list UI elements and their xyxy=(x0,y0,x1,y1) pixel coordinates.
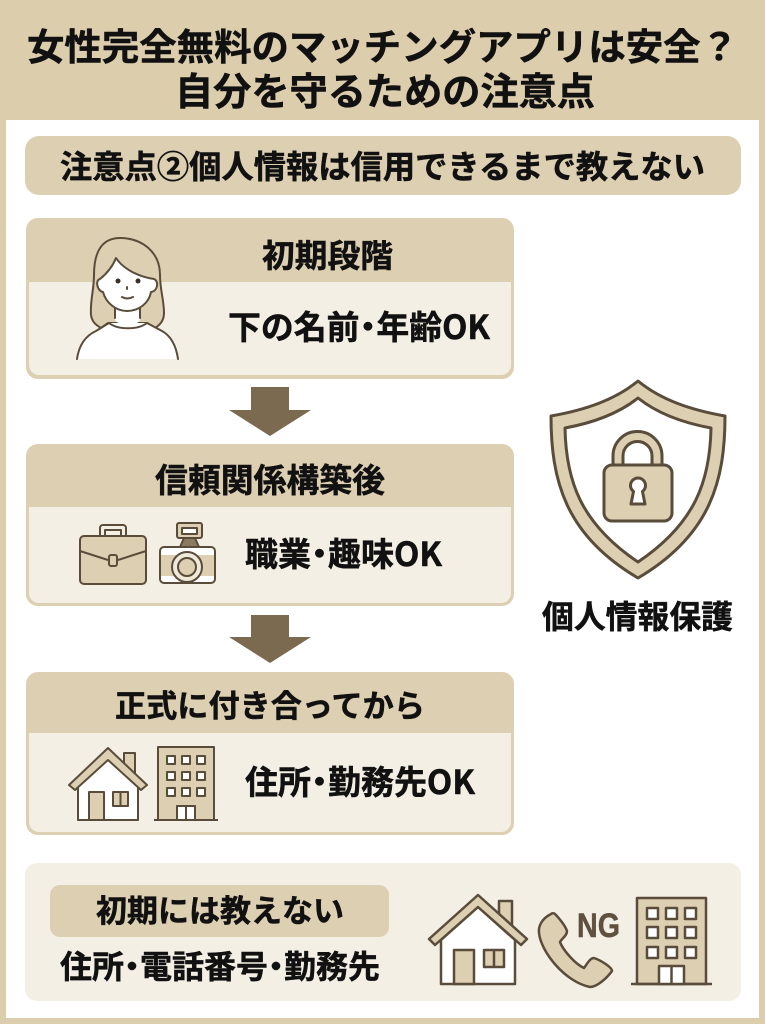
label: personal information protection: 個人情報保護 xyxy=(542,592,733,638)
arrow 1 xyxy=(229,387,311,436)
icon: house xyxy=(429,895,527,984)
icon: camera xyxy=(160,523,215,583)
panel: after officially dating xyxy=(26,672,514,835)
icon: telephone xyxy=(539,913,612,987)
icon: woman xyxy=(77,238,178,359)
panel: do not tell early xyxy=(25,863,741,1001)
icon: house xyxy=(69,748,147,820)
panel: after building trust xyxy=(26,444,514,606)
heading: caution 2: 注意点②個人情報は信用できるまで教えない xyxy=(60,142,705,188)
icon: shield with padlock xyxy=(551,381,725,578)
icon: briefcase xyxy=(80,525,146,584)
icon: office building xyxy=(631,898,712,984)
text: address, phone, workplace: 住所・電話番号・勤務先 xyxy=(60,942,380,988)
title xyxy=(27,17,738,116)
heading: after officially dating: 正式に付き合ってから xyxy=(115,681,425,726)
heading: do not tell early xyxy=(50,885,389,937)
heading: caution 2 xyxy=(25,136,741,195)
heading: initial stage: 初期段階 xyxy=(262,231,393,277)
panel: initial stage xyxy=(26,218,514,379)
heading: do not tell early: 初期には教えない xyxy=(96,886,344,931)
arrow 2 xyxy=(229,615,311,663)
heading: after building trust: 信頼関係構築後 xyxy=(155,454,385,502)
text: address and workplace: 住所・勤務先OK xyxy=(245,756,475,804)
text: first name and age: 下の名前・年齢OK xyxy=(228,301,490,349)
text: job and hobby: 職業・趣味OK xyxy=(245,528,442,576)
title: 女性完全無料のマッチングアプリは安全？ xyxy=(27,17,738,71)
title: 自分を守るための注意点 xyxy=(175,61,595,116)
icon: office building xyxy=(154,747,218,820)
label: NG: NG xyxy=(577,907,620,945)
